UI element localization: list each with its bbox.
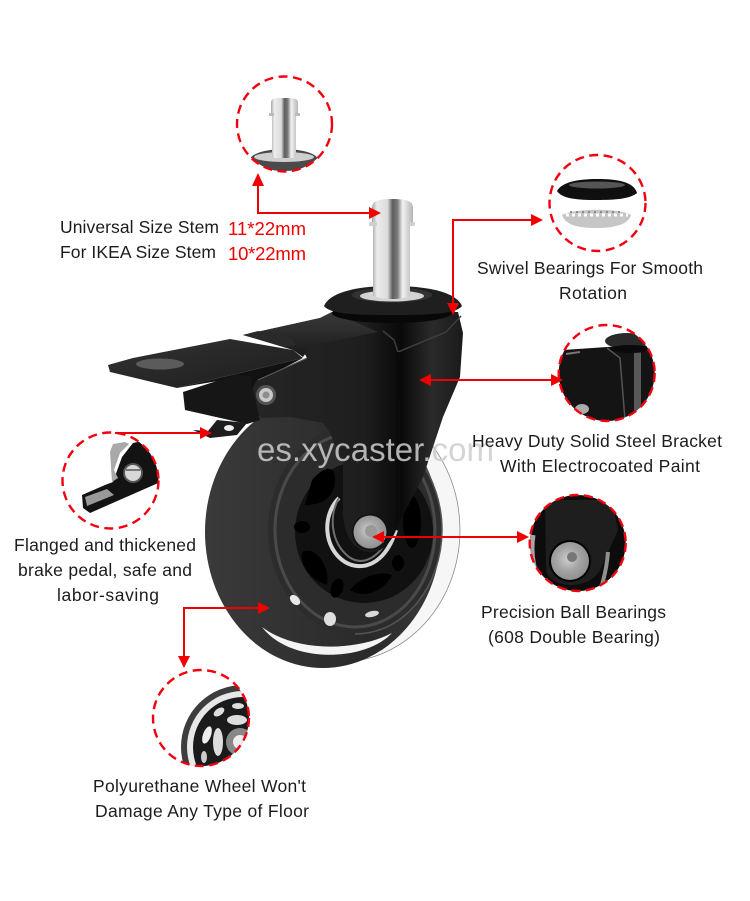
label: stem sizes <box>60 217 306 264</box>
label: ball bearings <box>481 602 666 647</box>
label: steel bracket: Heavy Duty Solid Steel Bracket <box>472 431 722 451</box>
label: polyurethane wheel: Damage Any Type of Floor <box>95 801 309 821</box>
arrow: polyurethane wheel <box>178 602 270 668</box>
axle bolt cap <box>352 514 388 550</box>
label: stem sizes: 11*22mm <box>228 218 306 239</box>
label: stem sizes: Universal Size Stem <box>60 217 219 237</box>
brake pedal <box>108 331 303 438</box>
label: ball bearings: (608 Double Bearing) <box>488 627 660 647</box>
label: brake pedal: labor-saving <box>57 585 159 605</box>
label: swivel bearings: Swivel Bearings For Smooth <box>477 258 703 278</box>
arrow: brake pedal <box>115 427 212 439</box>
watermark: es.xycaster.com <box>257 431 494 468</box>
swivel ring <box>324 286 462 323</box>
label: polyurethane wheel: Polyurethane Wheel Won't <box>93 776 306 796</box>
bracket pivot bolt <box>256 385 276 405</box>
label: stem sizes: For IKEA Size Stem <box>60 242 216 262</box>
label: brake pedal: brake pedal, safe and <box>18 560 192 580</box>
label: swivel bearings <box>477 258 703 303</box>
label: brake pedal: Flanged and thickened <box>14 535 196 555</box>
label: steel bracket <box>472 431 722 476</box>
callout: brake pedal circle <box>62 432 165 528</box>
arrow: ball bearing <box>372 531 529 543</box>
callout: ball bearing circle <box>528 493 628 593</box>
stem <box>369 199 415 299</box>
caster product photo <box>108 199 463 668</box>
wheel <box>205 396 460 668</box>
label: stem sizes: 10*22mm <box>228 243 306 264</box>
label: swivel bearings: Rotation <box>559 283 627 303</box>
callout: stem detail circle <box>237 76 332 172</box>
label: brake pedal <box>14 535 196 605</box>
label: ball bearings: Precision Ball Bearings <box>481 602 666 622</box>
label: steel bracket: With Electrocoated Paint <box>500 456 700 476</box>
arrow: stem <box>252 173 381 219</box>
label: polyurethane wheel <box>93 776 309 821</box>
callout: swivel bearings circle <box>550 155 646 251</box>
arrow: steel bracket <box>419 374 563 386</box>
steel bracket <box>177 312 463 552</box>
arrow: swivel bearings <box>447 214 543 315</box>
callout: polyurethane wheel circle <box>152 668 250 768</box>
callout: steel bracket circle <box>558 325 660 425</box>
